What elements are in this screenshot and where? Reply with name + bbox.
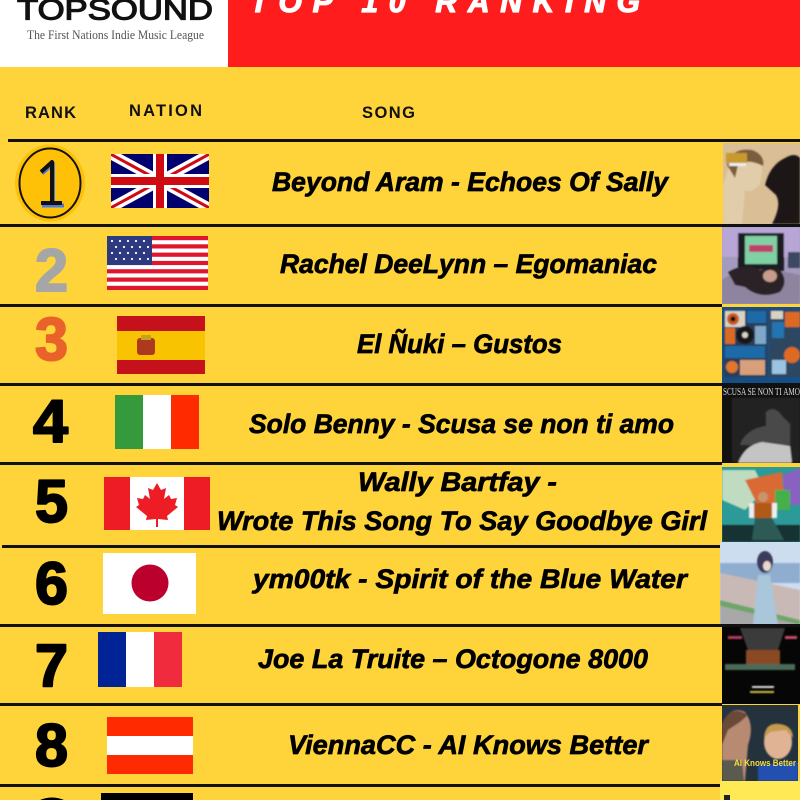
rank 1 badge — [15, 144, 85, 222]
flag: Italy — [115, 395, 199, 449]
title banner — [228, 0, 800, 67]
logo tagline: The First Nations Indie Music League — [27, 28, 204, 42]
album art: rank 9 (cropped) — [720, 781, 800, 800]
song title: Joe La Truite – Octogone 8000 — [258, 644, 648, 674]
rank 7: 7 — [35, 632, 68, 699]
song title: ViennaCC - AI Knows Better — [288, 730, 649, 760]
song title: Solo Benny - Scusa se non ti amo — [249, 409, 674, 439]
album art: Rachel DeeLynn — [722, 227, 800, 304]
song title: ym00tk - Spirit of the Blue Water — [251, 564, 689, 594]
flag: United States — [107, 236, 208, 290]
row 4 — [33, 388, 674, 455]
row 8 — [35, 712, 649, 779]
heading: rank: RANK — [25, 104, 76, 122]
rank 5: 5 — [35, 468, 68, 535]
song title: Wally Bartfay - — [358, 467, 557, 497]
album art: Solo Benny — [722, 386, 800, 463]
rank 6: 6 — [35, 550, 68, 617]
flag: France — [98, 632, 182, 687]
rank 2: 2 — [35, 237, 68, 304]
flag: Spain — [117, 316, 205, 374]
song title: El Ñuki – Gustos — [357, 328, 562, 359]
heading: nation: NATION — [129, 102, 202, 120]
row 6 — [35, 550, 689, 617]
album art: Joe La Truite — [722, 627, 800, 704]
album art: Wally Bartfay — [722, 467, 800, 542]
album art: Beyond Aram — [723, 143, 800, 224]
row 3 — [35, 306, 562, 374]
column headings — [25, 102, 415, 122]
row 9 (cropped at page edge) — [40, 793, 193, 800]
flag: Germany — [101, 793, 193, 800]
album art: El Nuki — [722, 307, 800, 384]
song title: Wrote This Song To Say Goodbye Girl — [217, 506, 707, 536]
album art: ViennaCC — [722, 705, 798, 781]
flag: United Kingdom — [111, 154, 209, 208]
rank 3: 3 — [35, 306, 68, 373]
rank 4: 4 — [33, 388, 69, 455]
row 1 — [15, 144, 670, 222]
song title — [217, 467, 707, 536]
rank 8: 8 — [35, 712, 68, 779]
song title: Rachel DeeLynn – Egomaniac — [280, 249, 657, 279]
album art: ym00tk — [720, 542, 800, 625]
row 7 — [35, 632, 648, 699]
flag: Japan — [103, 553, 196, 614]
rank 9, only its top edge shows — [40, 798, 64, 800]
logo panel — [0, 0, 228, 67]
flag: Austria — [107, 717, 193, 774]
row 5 — [35, 467, 707, 536]
row 2 — [35, 236, 657, 304]
song title: Beyond Aram - Echoes Of Sally — [272, 167, 670, 197]
flag: Canada — [104, 477, 210, 530]
heading: song: SONG — [362, 104, 415, 122]
